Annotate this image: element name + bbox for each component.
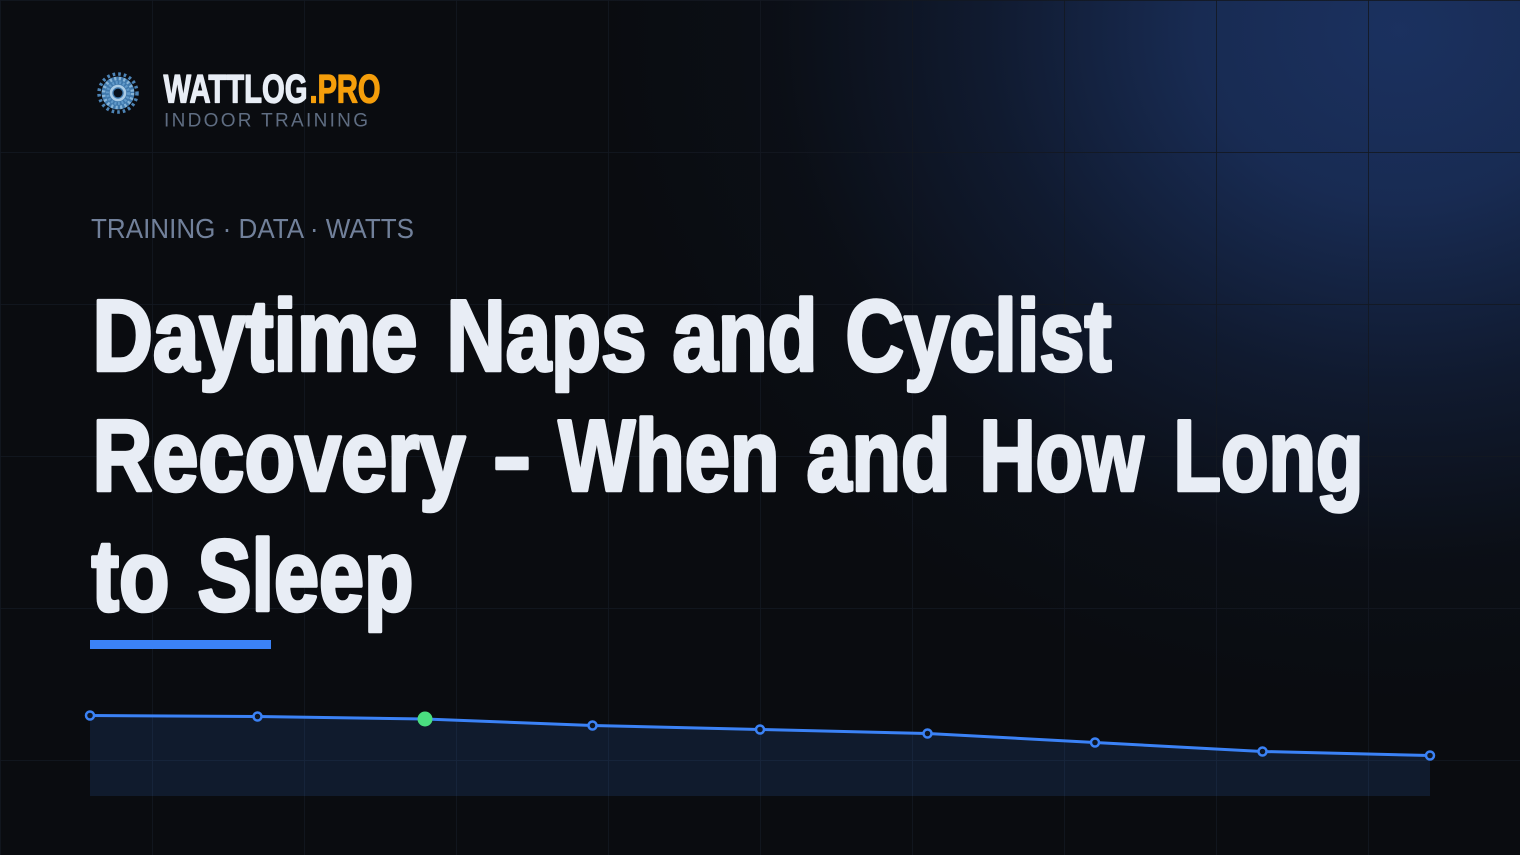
title: Long	[1174, 400, 1364, 512]
chart markers	[86, 712, 1434, 760]
title: Cyclist	[846, 280, 1112, 392]
highlighted green marker	[418, 712, 432, 726]
title	[92, 280, 1364, 632]
chart line	[90, 716, 1430, 756]
chart area fill	[90, 716, 1430, 796]
title accent bar	[90, 640, 271, 649]
title: Sleep	[198, 520, 414, 632]
title: When	[558, 400, 780, 512]
title: How	[980, 400, 1144, 512]
title: to	[92, 520, 170, 632]
title: –	[494, 400, 530, 512]
eyebrow label: TRAINING · DATA · WATTS	[91, 213, 414, 244]
line chart	[86, 712, 1434, 796]
logo wordmark: .PRO	[310, 68, 380, 112]
title: Recovery	[92, 400, 466, 512]
logo tagline: INDOOR TRAINING	[164, 110, 368, 132]
icon: cassette gear logo	[99, 74, 137, 112]
title: Naps	[446, 280, 646, 392]
title: Daytime	[92, 280, 418, 392]
title: and	[806, 400, 950, 512]
logo wordmark: WATTLOG	[164, 68, 308, 112]
title: and	[672, 280, 818, 392]
